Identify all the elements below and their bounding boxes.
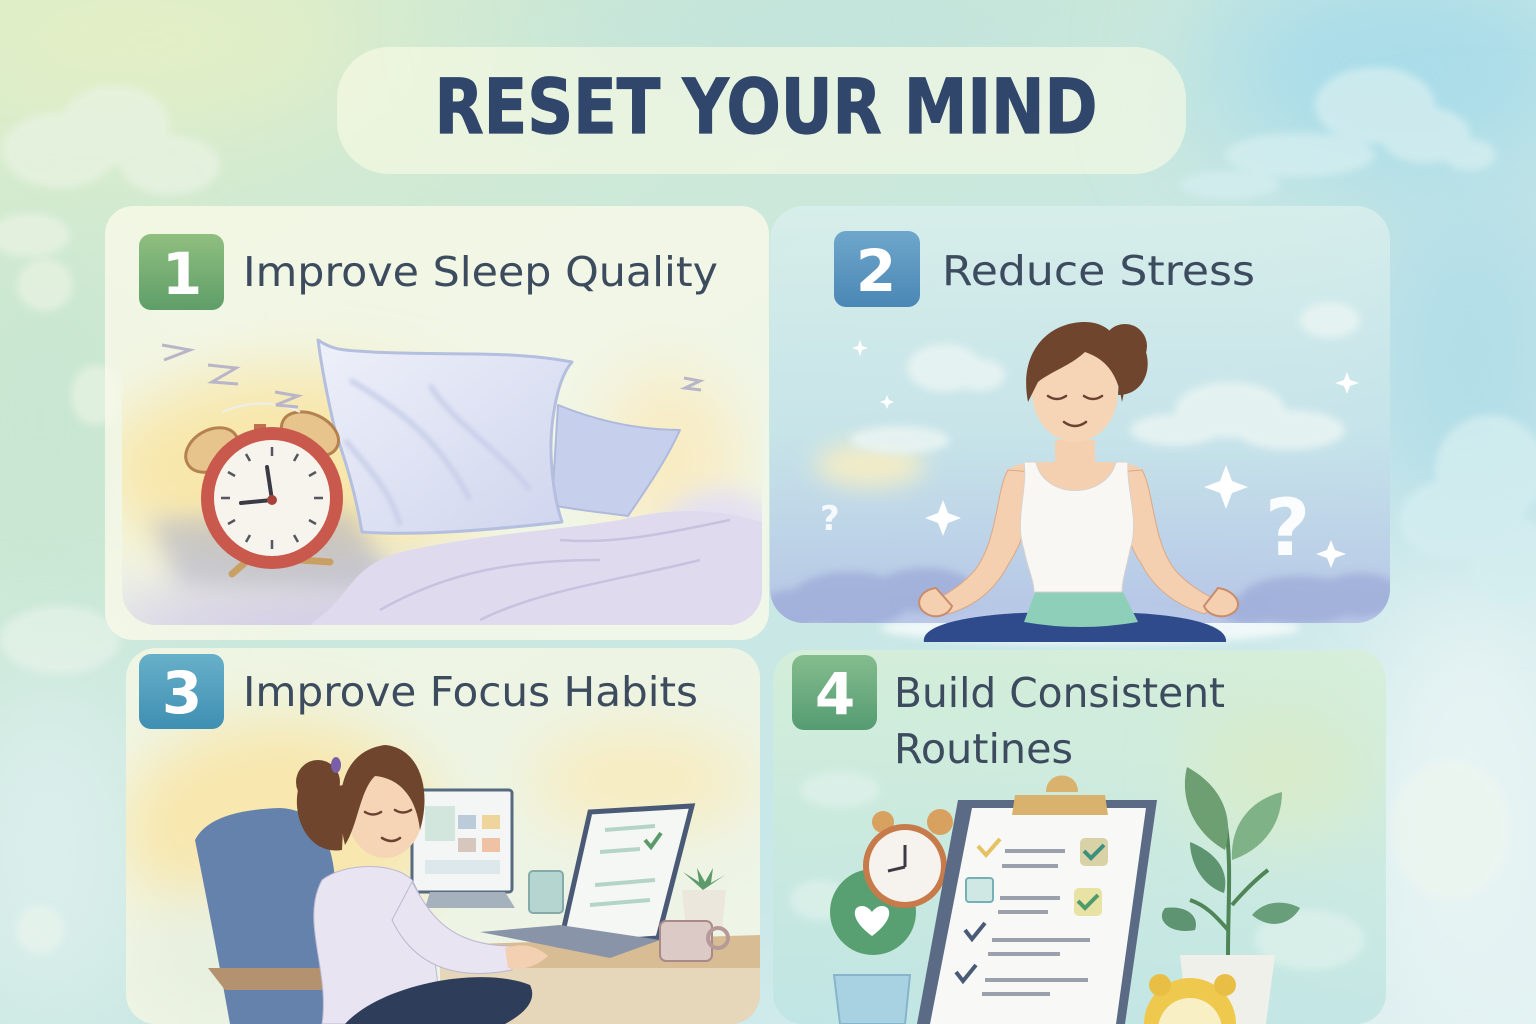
heading 2: Reduce Stress <box>942 247 1255 295</box>
desk <box>440 935 760 1024</box>
number badge 3: 3 <box>162 659 202 727</box>
figure: meditating woman <box>919 322 1238 642</box>
number badge 3 <box>139 654 224 729</box>
icon: front pillow <box>318 340 572 533</box>
number badge 4 <box>792 655 877 730</box>
panel 4: build consistent routines <box>773 650 1386 1024</box>
illustration: clouds backdrop <box>760 302 1400 630</box>
icon: clipboard <box>917 776 1157 1024</box>
icon: desktop monitor <box>412 790 515 908</box>
icon: mug <box>660 921 728 961</box>
icon: chair <box>195 808 335 1024</box>
illustration: backdrop <box>790 700 1370 970</box>
number badge 4: 4 <box>815 660 855 728</box>
icon: potted plant <box>1162 767 1300 1024</box>
illustration: backdrop <box>120 720 760 1024</box>
bed shadow <box>150 510 400 590</box>
icon: small alarm clock <box>863 809 953 908</box>
heading 1: Improve Sleep Quality <box>243 248 718 296</box>
blanket <box>310 511 770 630</box>
icon: green heart circle <box>830 869 916 955</box>
panel 2: reduce stress <box>760 206 1400 644</box>
figure: woman at desk <box>208 745 548 1024</box>
icon: question marks and stars: ? <box>820 499 840 539</box>
heading 4 second line: Routines <box>894 725 1073 773</box>
icon: alarm clock <box>178 403 346 574</box>
title <box>337 47 1186 174</box>
number badge 2 <box>834 231 920 307</box>
illustration: sleep scene <box>122 340 762 625</box>
number badge 2: 2 <box>856 237 896 305</box>
heading 4: Build Consistent <box>894 669 1225 717</box>
title: RESET YOUR MIND <box>434 62 1098 151</box>
icon: back pillow <box>552 405 680 516</box>
icon: blue glass <box>834 975 910 1024</box>
icon: laptop <box>480 806 692 958</box>
icon: yellow alarm clock <box>1144 974 1236 1024</box>
panel 1: improve sleep quality <box>105 206 769 640</box>
number badge 1 <box>139 234 224 310</box>
heading 3: Improve Focus Habits <box>243 668 698 716</box>
panel 3: improve focus habits <box>120 648 760 1024</box>
icon: z letters <box>162 345 701 407</box>
icon: question marks and stars: ? <box>1265 484 1310 574</box>
icon: plant <box>682 868 726 930</box>
icon: question marks and stars <box>820 340 1359 574</box>
icon: glass <box>529 871 563 913</box>
number badge 1: 1 <box>162 240 202 308</box>
